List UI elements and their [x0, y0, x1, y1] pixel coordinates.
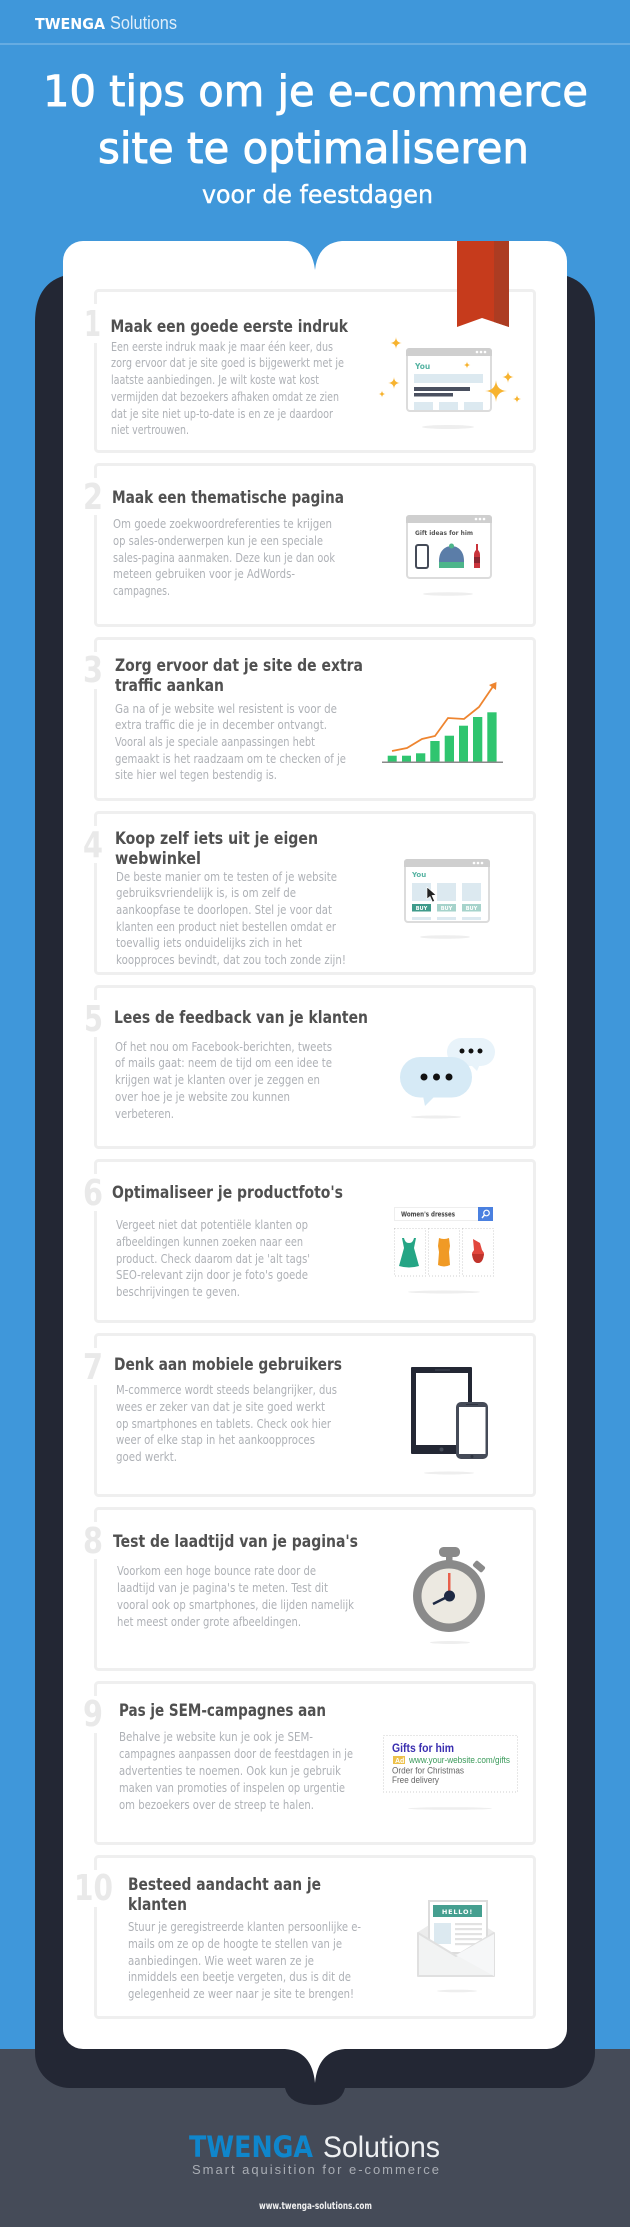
icon: shop browser with cursor: BUY	[416, 906, 428, 912]
number 10: 10	[74, 1868, 113, 1909]
body 7: goed werkt.	[116, 1450, 177, 1464]
number 5: 5	[84, 999, 103, 1040]
panel: tip 2	[83, 464, 534, 626]
heading 2: Maak een thematische pagina	[112, 488, 344, 508]
icon: shop browser with cursor: BUY	[441, 906, 453, 912]
icon: shop browser with cursor	[404, 859, 490, 939]
body 6: Vergeet niet dat potentiële klanten op	[116, 1218, 308, 1232]
body 8: het meest onder grote afbeeldingen.	[117, 1615, 301, 1629]
body 9: om bezoekers over de streep te halen.	[119, 1798, 314, 1812]
body 5: verbeteren.	[115, 1107, 174, 1121]
body 5: of mails gaat: neem de tijd om een idee te	[115, 1056, 332, 1070]
icon: image search with dresses: Women's dresses	[401, 1210, 455, 1218]
panel: tip 5	[84, 986, 534, 1148]
icon: search ad: Ad	[395, 1758, 404, 1765]
panel: tip 4	[83, 812, 534, 974]
body 1: Een eerste indruk maak je maar één keer, dus	[111, 340, 333, 354]
heading 1: Maak een goede eerste indruk	[110, 317, 349, 337]
body 7	[116, 1383, 337, 1464]
heading 3	[115, 656, 363, 696]
body 4	[116, 870, 346, 967]
body 7: op smartphones en tablets. Check ook hier	[116, 1417, 331, 1431]
body 5: over hoe je je website zou kunnen	[115, 1090, 290, 1104]
number 7: 7	[83, 1347, 103, 1388]
heading 8: Test de laadtijd van je pagina's	[113, 1532, 358, 1552]
body 1: zorg ervoor dat je site goed is bijgewerkt met je	[111, 356, 344, 370]
chart: rising green bars with orange trend arrow	[382, 682, 503, 763]
body 3: Vooral als je speciale aanpassingen hebt	[115, 735, 315, 749]
body 9	[119, 1730, 353, 1812]
body 4: koopproces bevindt, dat zou toch zonde zijn!	[116, 953, 346, 967]
footer url: www.twenga-solutions.com	[259, 2201, 372, 2212]
panel: tip 1	[84, 290, 534, 452]
body 2: campagnes.	[113, 584, 170, 598]
body 7: wees er zeker van dat je site goed werkt	[116, 1400, 325, 1414]
body 6: beschrijvingen te geven.	[116, 1285, 240, 1299]
bookmark ribbon	[457, 241, 509, 327]
icon: browser with sparkles: You	[414, 362, 430, 371]
number 1: 1	[84, 304, 101, 345]
number 6: 6	[83, 1173, 103, 1214]
body 10: Stuur je geregistreerde klanten persoonlijke e-	[128, 1920, 361, 1934]
icon: gift ideas browser	[406, 515, 492, 596]
body 8: Voorkom een hoge bounce rate door de	[117, 1564, 316, 1578]
body 7: weer of elke stap in het aankoopproces	[116, 1433, 315, 1447]
body 2: Om goede zoekwoordreferenties te krijgen	[113, 517, 332, 531]
body 1: niet vertrouwen.	[111, 423, 189, 437]
heading 10: Besteed aandacht aan je	[128, 1875, 321, 1895]
body 5: krijgen wat je klanten over je zeggen en	[115, 1073, 320, 1087]
body 1: laatste aanbiedingen. Je wilt koste wat kost	[111, 373, 319, 387]
body 2: sales-pagina aanmaken. Deze kun je dan ook	[113, 551, 335, 565]
icon: envelope with newsletter: HELLO!	[442, 1908, 473, 1916]
body 1: dat je site niet up-to-date is en ze je daardoor	[111, 407, 333, 421]
panel: tip 9	[83, 1682, 534, 1844]
icon: tablet and smartphone	[411, 1367, 488, 1474]
body 4: gebruiksvriendelijk is, is om zelf de	[116, 886, 296, 900]
footer tagline: Smart aquisition for e-commerce	[192, 2162, 439, 2177]
body 9: maken van promoties of inspelen op urgentie	[119, 1781, 345, 1795]
body 9: Behalve je website kun je ook je SEM-	[119, 1730, 313, 1744]
heading 4: webwinkel	[115, 849, 201, 869]
body 7: M-commerce wordt steeds belangrijker, dus	[116, 1383, 337, 1397]
body 5	[115, 1040, 332, 1121]
icon: shop browser with cursor: You	[411, 871, 426, 879]
header logo: TWENGA	[35, 15, 105, 33]
heading 10: klanten	[128, 1895, 187, 1915]
icon: stopwatch	[413, 1547, 486, 1644]
icon: search ad: Gifts for him	[392, 1741, 454, 1755]
footer logo	[189, 2130, 440, 2164]
title: voor de feestdagen	[202, 180, 433, 209]
body 3: extra traffic die je in december ontvangt.	[115, 718, 327, 732]
icon: browser with sparkles	[378, 337, 521, 429]
body 10: gelegenheid ze weer naar je site te brengen!	[128, 1987, 354, 2001]
number 8: 8	[83, 1521, 103, 1562]
body 10: aanbiedingen. Wie weet waren ze je	[128, 1954, 314, 1968]
body 8: laadtijd van je pagina's te meten. Test dit	[117, 1581, 328, 1595]
icon: image search with dresses	[394, 1207, 494, 1294]
number 3: 3	[83, 650, 103, 691]
icon: shop browser with cursor: BUY	[466, 906, 478, 912]
heading 5: Lees de feedback van je klanten	[114, 1008, 368, 1028]
title	[43, 67, 588, 209]
panel: tip 8	[83, 1508, 534, 1670]
heading 6: Optimaliseer je productfoto's	[112, 1183, 343, 1203]
header logo: Solutions	[110, 13, 177, 33]
heading 4	[115, 829, 318, 869]
icon: search ad: www.your-website.com/gifts	[408, 1755, 510, 1765]
heading 9: Pas je SEM-campagnes aan	[119, 1701, 326, 1721]
title: 10 tips om je e-commerce	[43, 67, 588, 117]
panel: tip 7	[83, 1334, 534, 1496]
dark book cover	[35, 276, 595, 2105]
body 2: meteen gebruiken voor je AdWords-	[113, 567, 295, 581]
number 9: 9	[83, 1694, 103, 1735]
body 6: product. Check daarom dat je 'alt tags'	[116, 1252, 310, 1266]
icon: envelope with newsletter	[418, 1901, 494, 1992]
body 3	[115, 702, 346, 782]
body 10: inmiddels een beetje vergeten, dus is dit de	[128, 1970, 351, 1984]
body 4: toevallig iets onduidelijks zich in het	[116, 936, 302, 950]
body 8	[117, 1564, 354, 1629]
body 2: op sales-onderwerpen kun je een speciale	[113, 534, 323, 548]
heading 4: Koop zelf iets uit je eigen	[115, 829, 318, 849]
body 2	[113, 517, 335, 598]
body 4: klanten een product niet bestellen omdat er	[116, 920, 336, 934]
body 9: advertenties te noemen. Ook kun je gebruik	[119, 1764, 341, 1778]
body 10	[128, 1920, 361, 2001]
body 3: gemaakt is het raadzaam om te checken of je	[115, 752, 346, 766]
number 2: 2	[83, 477, 103, 518]
body 4: De beste manier om te testen of je website	[116, 870, 337, 884]
icon: search ad	[384, 1736, 518, 1810]
heading 10	[128, 1875, 321, 1915]
panel: tip 6	[83, 1160, 534, 1322]
title: site te optimaliseren	[98, 124, 529, 174]
footer logo: TWENGA	[189, 2130, 313, 2164]
body 6: afbeeldingen kunnen zoeken naar een	[116, 1235, 303, 1249]
header logo	[35, 13, 177, 33]
body 6	[116, 1218, 310, 1299]
body 1	[111, 340, 344, 437]
white book page	[63, 241, 567, 2083]
body 8: vooral ook op smartphones, die lijden namelijk	[117, 1598, 354, 1612]
heading 3: Zorg ervoor dat je site de extra	[115, 656, 363, 676]
icon: gift ideas browser: Gift ideas for him	[415, 529, 473, 537]
body 5: Of het nou om Facebook-berichten, tweets	[115, 1040, 332, 1054]
icon: speech bubbles	[400, 1038, 495, 1118]
body 1: vermijden dat bezoekers afhaken omdat ze zien	[111, 390, 339, 404]
footer logo: Solutions	[323, 2131, 440, 2164]
body 3: Ga na of je website wel resistent is voor de	[115, 702, 337, 716]
body 10: mails om ze op de hoogte te stellen van je	[128, 1937, 342, 1951]
heading 3: traffic aankan	[115, 676, 224, 696]
heading 7: Denk aan mobiele gebruikers	[114, 1355, 342, 1375]
icon: search ad: Order for Christmas	[392, 1766, 464, 1776]
icon: search ad: Free delivery	[392, 1775, 439, 1785]
number 4: 4	[83, 825, 103, 866]
body 9: campagnes aanpassen door de feestdagen in je	[119, 1747, 353, 1761]
footer band	[0, 2049, 630, 2227]
body 3: site hier wel tegen bestendig is.	[115, 768, 277, 782]
panel: tip 10	[74, 1856, 534, 2018]
body 4: aankoopfase te doorlopen. Stel je voor dat	[116, 903, 332, 917]
panel: tip 3	[83, 638, 534, 800]
body 6: SEO-relevant zijn door je foto's goede	[116, 1268, 308, 1282]
